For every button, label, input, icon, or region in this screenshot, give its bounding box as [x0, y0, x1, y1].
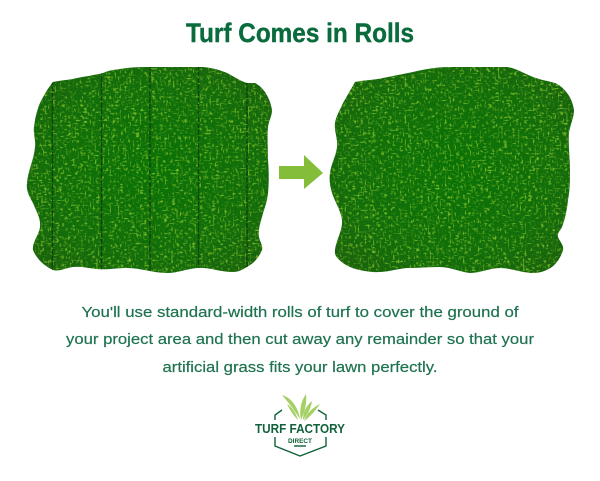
logo subtitle: DIRECT [288, 438, 312, 445]
description text: your project area and then cut away any remainder so that your [66, 331, 534, 348]
description text [66, 304, 534, 376]
panel: finished seamless turf [330, 67, 574, 273]
logo wordmark: TURF FACTORY [255, 422, 346, 436]
description text: artificial grass fits your lawn perfectly. [162, 359, 438, 376]
roll seams [52, 65, 247, 275]
title: Turf Comes in Rolls [186, 18, 414, 48]
icon: hexagon frame [275, 410, 326, 456]
description text: You'll use standard-width rolls of turf to cover the ground of [82, 304, 519, 321]
arrow [279, 155, 323, 189]
panel: turf rolls with visible seams [26, 67, 272, 273]
icon: grass blades [282, 394, 320, 421]
logo: Turf Factory Direct [255, 394, 346, 456]
